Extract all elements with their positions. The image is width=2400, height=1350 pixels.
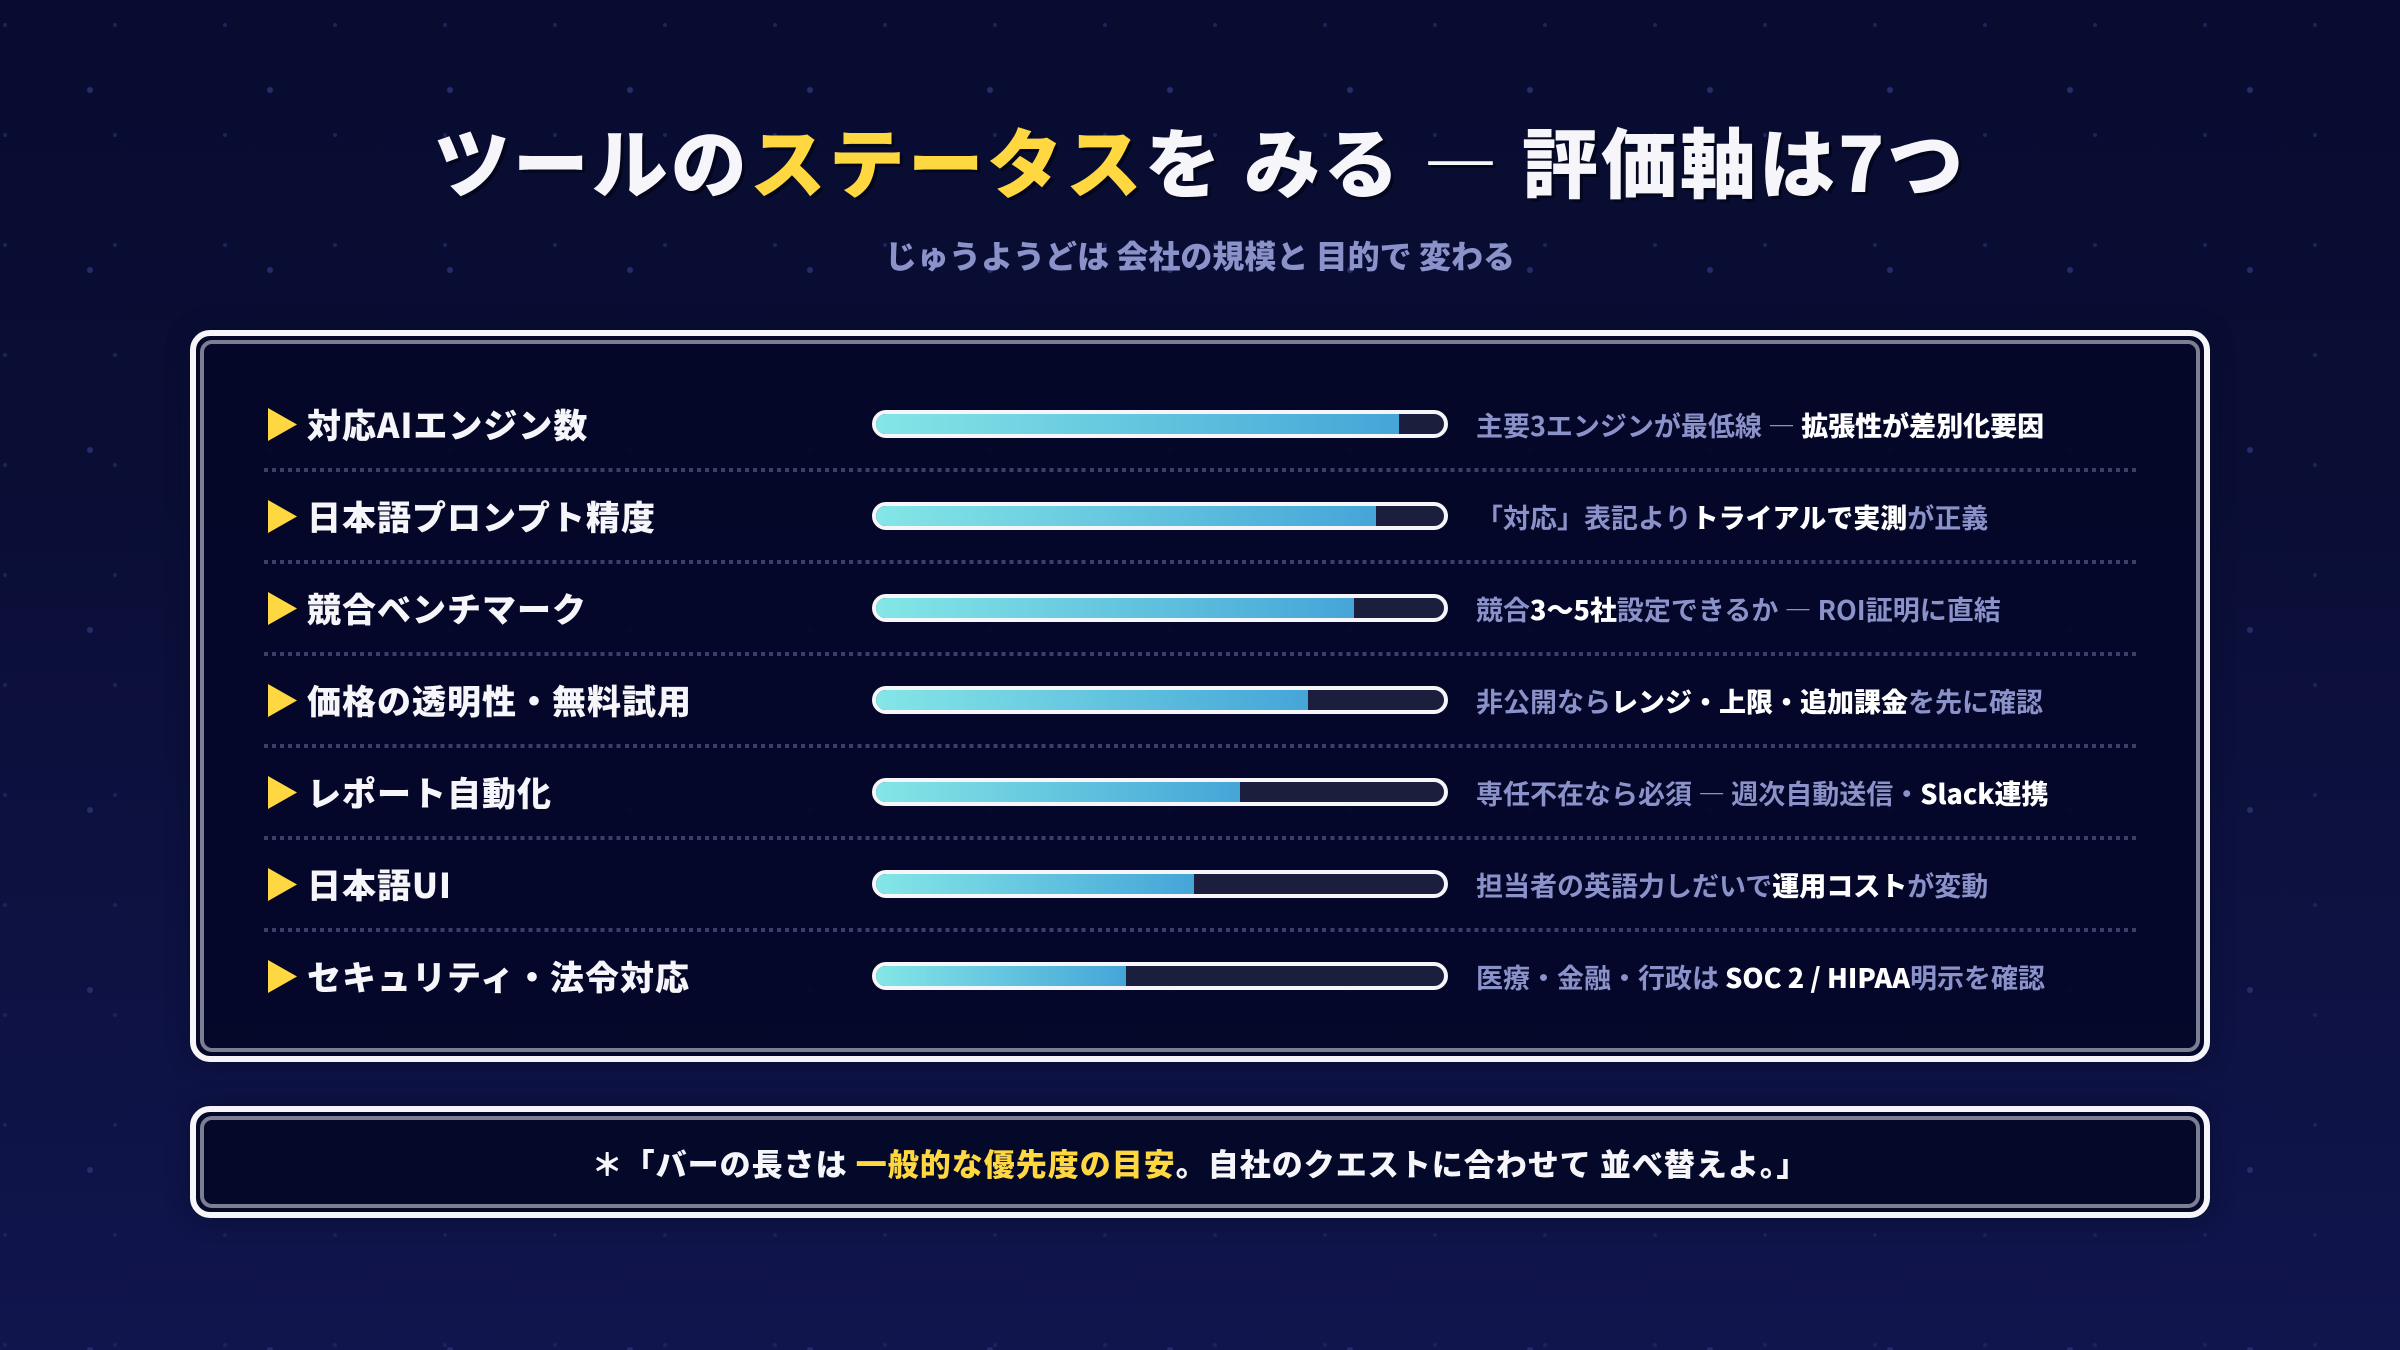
row description: 専任不在なら必須 — 週次自動送信・Slack連携 bbox=[1476, 773, 2048, 812]
row 6: 日本語UI bbox=[268, 859, 1988, 908]
note text: ＊「バーの長さは 一般的な優先度の目安。自社のクエストに合わせて 並べ替えよ。」 bbox=[592, 1140, 1808, 1185]
row label: 日本語プロンプト精度 bbox=[307, 491, 656, 540]
panel: evaluation axes bbox=[190, 330, 2210, 1062]
icon: arrow bbox=[268, 684, 297, 717]
progress bar 44% bbox=[872, 962, 1448, 990]
progress bar 64% bbox=[872, 778, 1448, 806]
row description: 医療・金融・行政は SOC 2 / HIPAA明示を確認 bbox=[1476, 957, 2045, 996]
row label: レポート自動化 bbox=[307, 767, 552, 816]
icon: arrow bbox=[268, 500, 297, 533]
icon: arrow bbox=[268, 776, 297, 809]
icon: arrow bbox=[268, 592, 297, 625]
row 2: 日本語プロンプト精度 bbox=[268, 491, 1988, 540]
row description: 主要3エンジンが最低線 — 拡張性が差別化要因 bbox=[1476, 405, 2044, 444]
row 3: 競合ベンチマーク bbox=[268, 583, 2001, 632]
row description: 競合3〜5社設定できるか — ROI証明に直結 bbox=[1476, 589, 2001, 628]
row label: 価格の透明性・無料試用 bbox=[307, 675, 692, 724]
subtitle: じゅうようどは 会社の規模と 目的で 変わる bbox=[885, 232, 1515, 278]
progress bar 76% bbox=[872, 686, 1448, 714]
row 4: 価格の透明性・無料試用 bbox=[268, 675, 2043, 724]
progress bar 92% bbox=[872, 410, 1448, 438]
row description: 担当者の英語力しだいで運用コストが変動 bbox=[1476, 865, 1988, 904]
row 7: セキュリティ・法令対応 bbox=[268, 951, 2045, 1000]
row 1: 対応AIエンジン数 bbox=[268, 399, 2044, 448]
title: ツールのステータスを みる — 評価軸は7つ bbox=[434, 104, 1966, 214]
row label: セキュリティ・法令対応 bbox=[307, 951, 690, 1000]
row label: 競合ベンチマーク bbox=[307, 583, 587, 632]
row label: 対応AIエンジン数 bbox=[307, 399, 588, 448]
icon: arrow bbox=[268, 960, 297, 993]
icon: arrow bbox=[268, 868, 297, 901]
progress bar 84% bbox=[872, 594, 1448, 622]
progress bar 88% bbox=[872, 502, 1448, 530]
panel: note bbox=[190, 1106, 2210, 1218]
row description: 非公開ならレンジ・上限・追加課金を先に確認 bbox=[1476, 681, 2043, 720]
icon: arrow bbox=[268, 408, 297, 441]
row label: 日本語UI bbox=[307, 859, 452, 908]
row description: 「対応」表記よりトライアルで実測が正義 bbox=[1476, 497, 1988, 536]
progress bar 56% bbox=[872, 870, 1448, 898]
row 5: レポート自動化 bbox=[268, 767, 2048, 816]
